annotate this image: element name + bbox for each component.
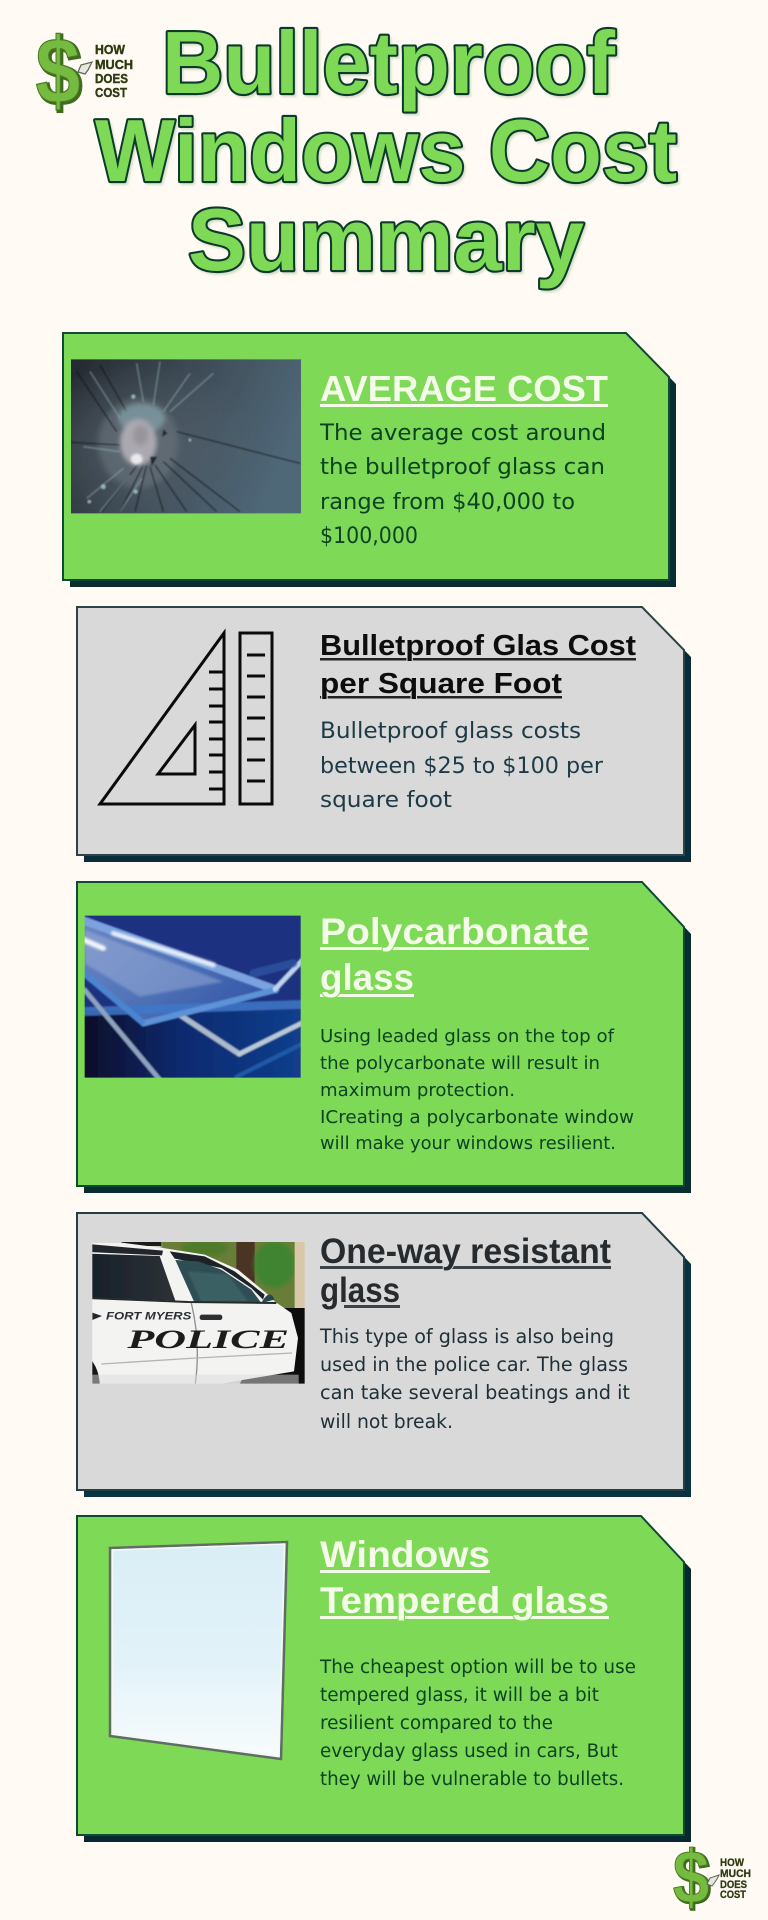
title: Summary — [190, 192, 586, 292]
title: Windows Cost — [95, 101, 677, 200]
body text: This type of glass is also being — [319, 1325, 614, 1348]
body text: ICreating a polycarbonate window — [320, 1107, 634, 1128]
logo wordmark: COST — [720, 1889, 746, 1901]
logo wordmark — [720, 1857, 751, 1901]
panel: one-way resistant glass — [77, 1213, 691, 1497]
heading — [320, 1534, 609, 1621]
title: Bulletproof — [162, 13, 616, 112]
heading: per Square Foot — [320, 668, 562, 700]
body text: they will be vulnerable to bullets. — [320, 1769, 624, 1790]
logo wordmark: MUCH — [720, 1868, 751, 1880]
body text: The average cost around — [319, 421, 606, 446]
icon: dollar sign: $ — [674, 1836, 711, 1920]
heading: Tempered glass — [320, 1580, 609, 1621]
photo: shattered glass — [67, 355, 307, 518]
heading — [320, 630, 636, 700]
body text — [320, 1026, 634, 1154]
body text: range from $40,000 to — [320, 490, 575, 515]
body text: used in the police car. The glass — [320, 1353, 628, 1376]
body text: the bulletproof glass can — [320, 455, 605, 480]
body text: can take several beatings and it — [320, 1381, 630, 1404]
photo: police car: POLICE — [126, 1324, 289, 1354]
heading — [320, 911, 589, 998]
heading: Polycarbonate — [320, 911, 589, 952]
body text: will not break. — [320, 1410, 453, 1433]
title: Windows Cost — [95, 101, 677, 200]
body text: everyday glass used in cars, But — [320, 1741, 618, 1762]
body text: tempered glass, it will be a bit — [320, 1685, 599, 1706]
heading: glass — [320, 957, 414, 998]
logo wordmark — [95, 42, 133, 100]
photo: police car — [88, 1238, 308, 1388]
icon: set square and ruler — [100, 633, 272, 804]
logo wordmark: COST — [95, 85, 127, 100]
body text — [320, 719, 604, 813]
logo wordmark: HOW — [720, 1857, 745, 1869]
title: Windows Cost — [97, 104, 679, 202]
panel: polycarbonate glass — [77, 882, 691, 1193]
body text: resilient compared to the — [320, 1713, 553, 1734]
panel: windows tempered glass — [77, 1516, 691, 1842]
panel: cost per square foot — [77, 607, 691, 862]
body text: $100,000 — [320, 524, 418, 549]
body text: between $25 to $100 per — [320, 754, 604, 779]
icon: dollar sign: $ — [673, 1835, 709, 1919]
body text — [319, 1325, 630, 1433]
photo: polycarbonate sheets — [84, 916, 301, 1078]
logo: how much does cost (top) — [36, 18, 133, 125]
heading: glass — [320, 1271, 400, 1310]
logo: how much does cost (bottom) — [673, 1835, 751, 1920]
body text: the polycarbonate will result in — [320, 1053, 600, 1074]
logo wordmark: DOES — [720, 1879, 747, 1891]
logo wordmark: MUCH — [95, 57, 133, 72]
heading: One-way resistant — [320, 1232, 611, 1271]
heading: AVERAGE COST — [320, 368, 608, 409]
body text: square foot — [320, 788, 452, 813]
title: Bulletproof — [164, 16, 618, 114]
body text — [319, 1657, 636, 1790]
panel: average cost — [63, 333, 676, 587]
title — [95, 13, 679, 292]
body text: The cheapest option will be to use — [319, 1657, 636, 1678]
photo: police car: FORT MYERS — [106, 1311, 192, 1323]
logo wordmark: DOES — [95, 71, 128, 86]
body text — [319, 421, 606, 549]
heading — [320, 1232, 611, 1310]
body text: will make your windows resilient. — [320, 1133, 616, 1154]
icon: dollar sign: $ — [36, 18, 80, 123]
body text: Using leaded glass on the top of — [320, 1026, 615, 1047]
icon: pointing hand — [707, 1875, 719, 1886]
title: Bulletproof — [162, 13, 616, 112]
heading: Windows — [320, 1534, 490, 1575]
body text: maximum protection. — [320, 1080, 515, 1101]
icon: pointing hand — [78, 62, 92, 74]
photo: window pane — [110, 1542, 287, 1759]
title: Summary — [188, 190, 584, 289]
title: Summary — [188, 190, 584, 289]
icon: dollar sign: $ — [37, 20, 82, 125]
body text: Bulletproof glass costs — [320, 719, 581, 744]
logo wordmark: HOW — [95, 42, 126, 57]
heading: Bulletproof Glas Cost — [320, 630, 636, 662]
